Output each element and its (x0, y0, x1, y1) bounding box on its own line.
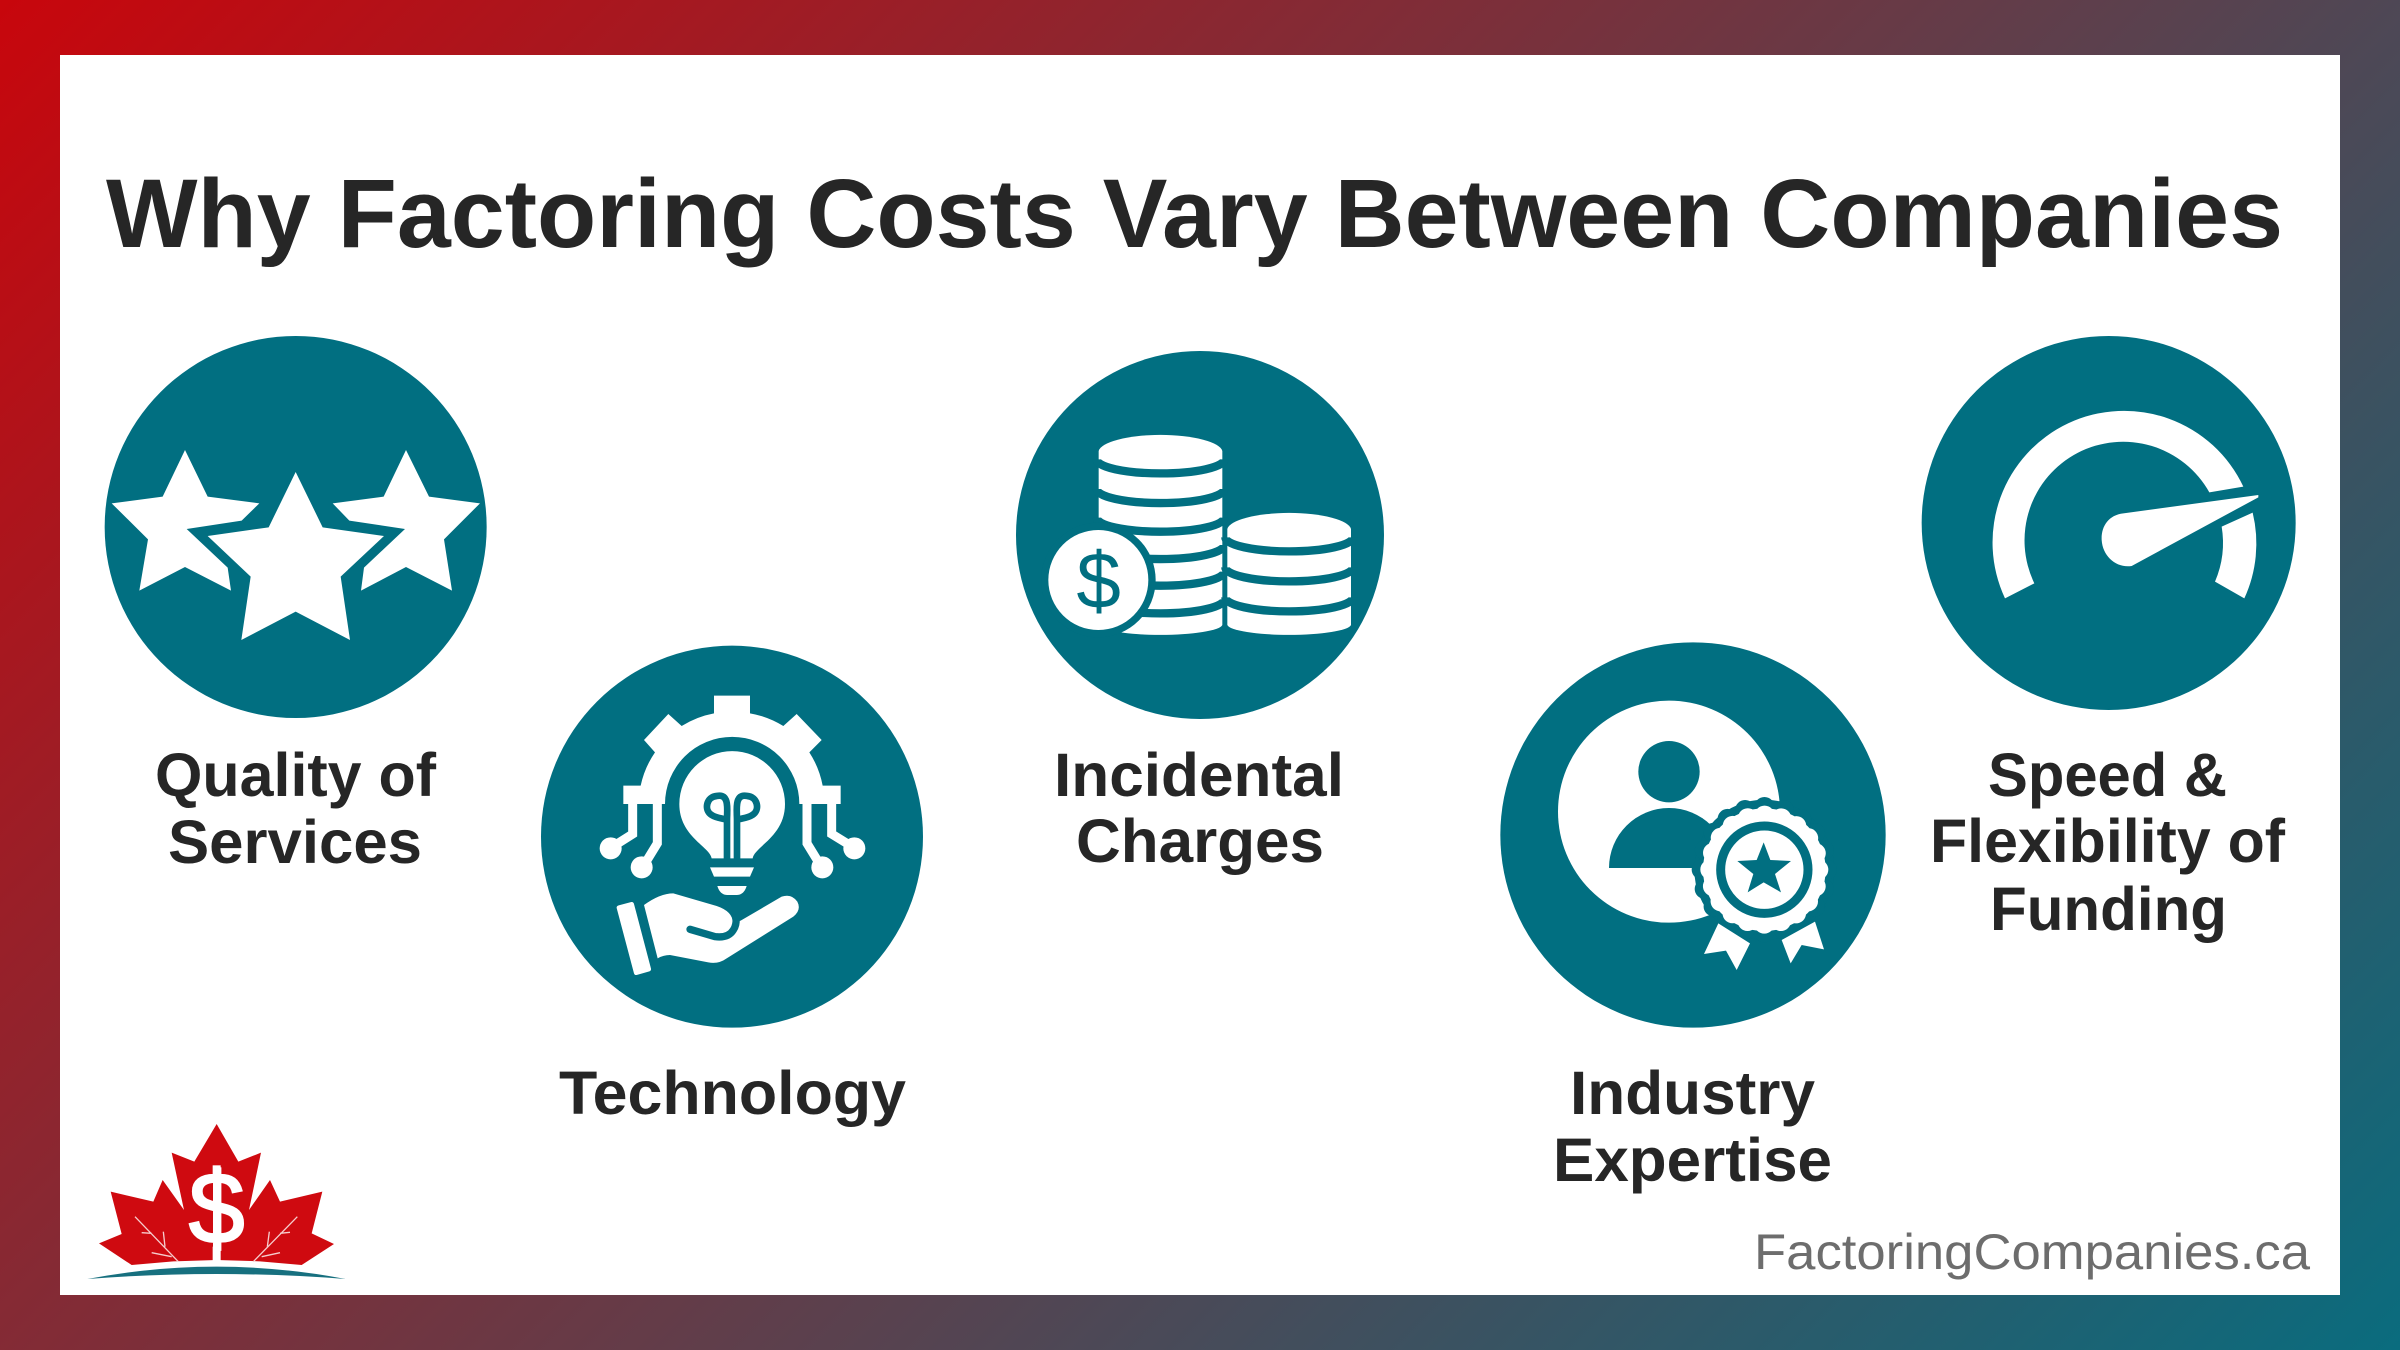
label: industry expertise: Expertise (1553, 1126, 1832, 1194)
label: industry expertise: Industry (1570, 1059, 1815, 1127)
label: speed and flexibility of funding: Speed & (1988, 741, 2227, 809)
label: speed and flexibility of funding: Flexibility of (1930, 807, 2286, 875)
icon: lightbulb, gear and hand (541, 646, 923, 1028)
label: quality of services: Services (168, 808, 422, 876)
label: quality of services (155, 741, 437, 876)
icon: coin stacks with dollar coin (1016, 351, 1384, 719)
logo: maple leaf with dollar sign: $ (189, 1153, 244, 1265)
label: incidental charges: Incidental (1054, 741, 1344, 809)
title: Why Factoring Costs Vary Between Companies (106, 159, 2283, 268)
panel: incidental charges (1016, 351, 1384, 875)
website address: FactoringCompanies.ca (1754, 1224, 2310, 1280)
icon: person with award badge (1500, 642, 1886, 1028)
label: technology: Technology (559, 1059, 906, 1127)
label: speed and flexibility of funding: Funding (1990, 875, 2227, 943)
label: incidental charges: Charges (1076, 807, 1324, 875)
label: speed and flexibility of funding (1930, 741, 2286, 943)
icon: three stars (105, 336, 487, 718)
panel: quality of services (105, 336, 487, 876)
panel: technology (541, 646, 923, 1127)
panel: speed and flexibility of funding (1922, 336, 2296, 943)
label: quality of services: Quality of (155, 741, 437, 809)
panel: industry expertise (1500, 642, 1886, 1194)
label: industry expertise (1553, 1059, 1832, 1194)
icon: coin stacks with dollar coin: $ (1076, 536, 1121, 625)
icon: speedometer gauge (1922, 336, 2296, 710)
label: incidental charges (1054, 741, 1344, 875)
logo: maple leaf with dollar sign (87, 1124, 346, 1279)
